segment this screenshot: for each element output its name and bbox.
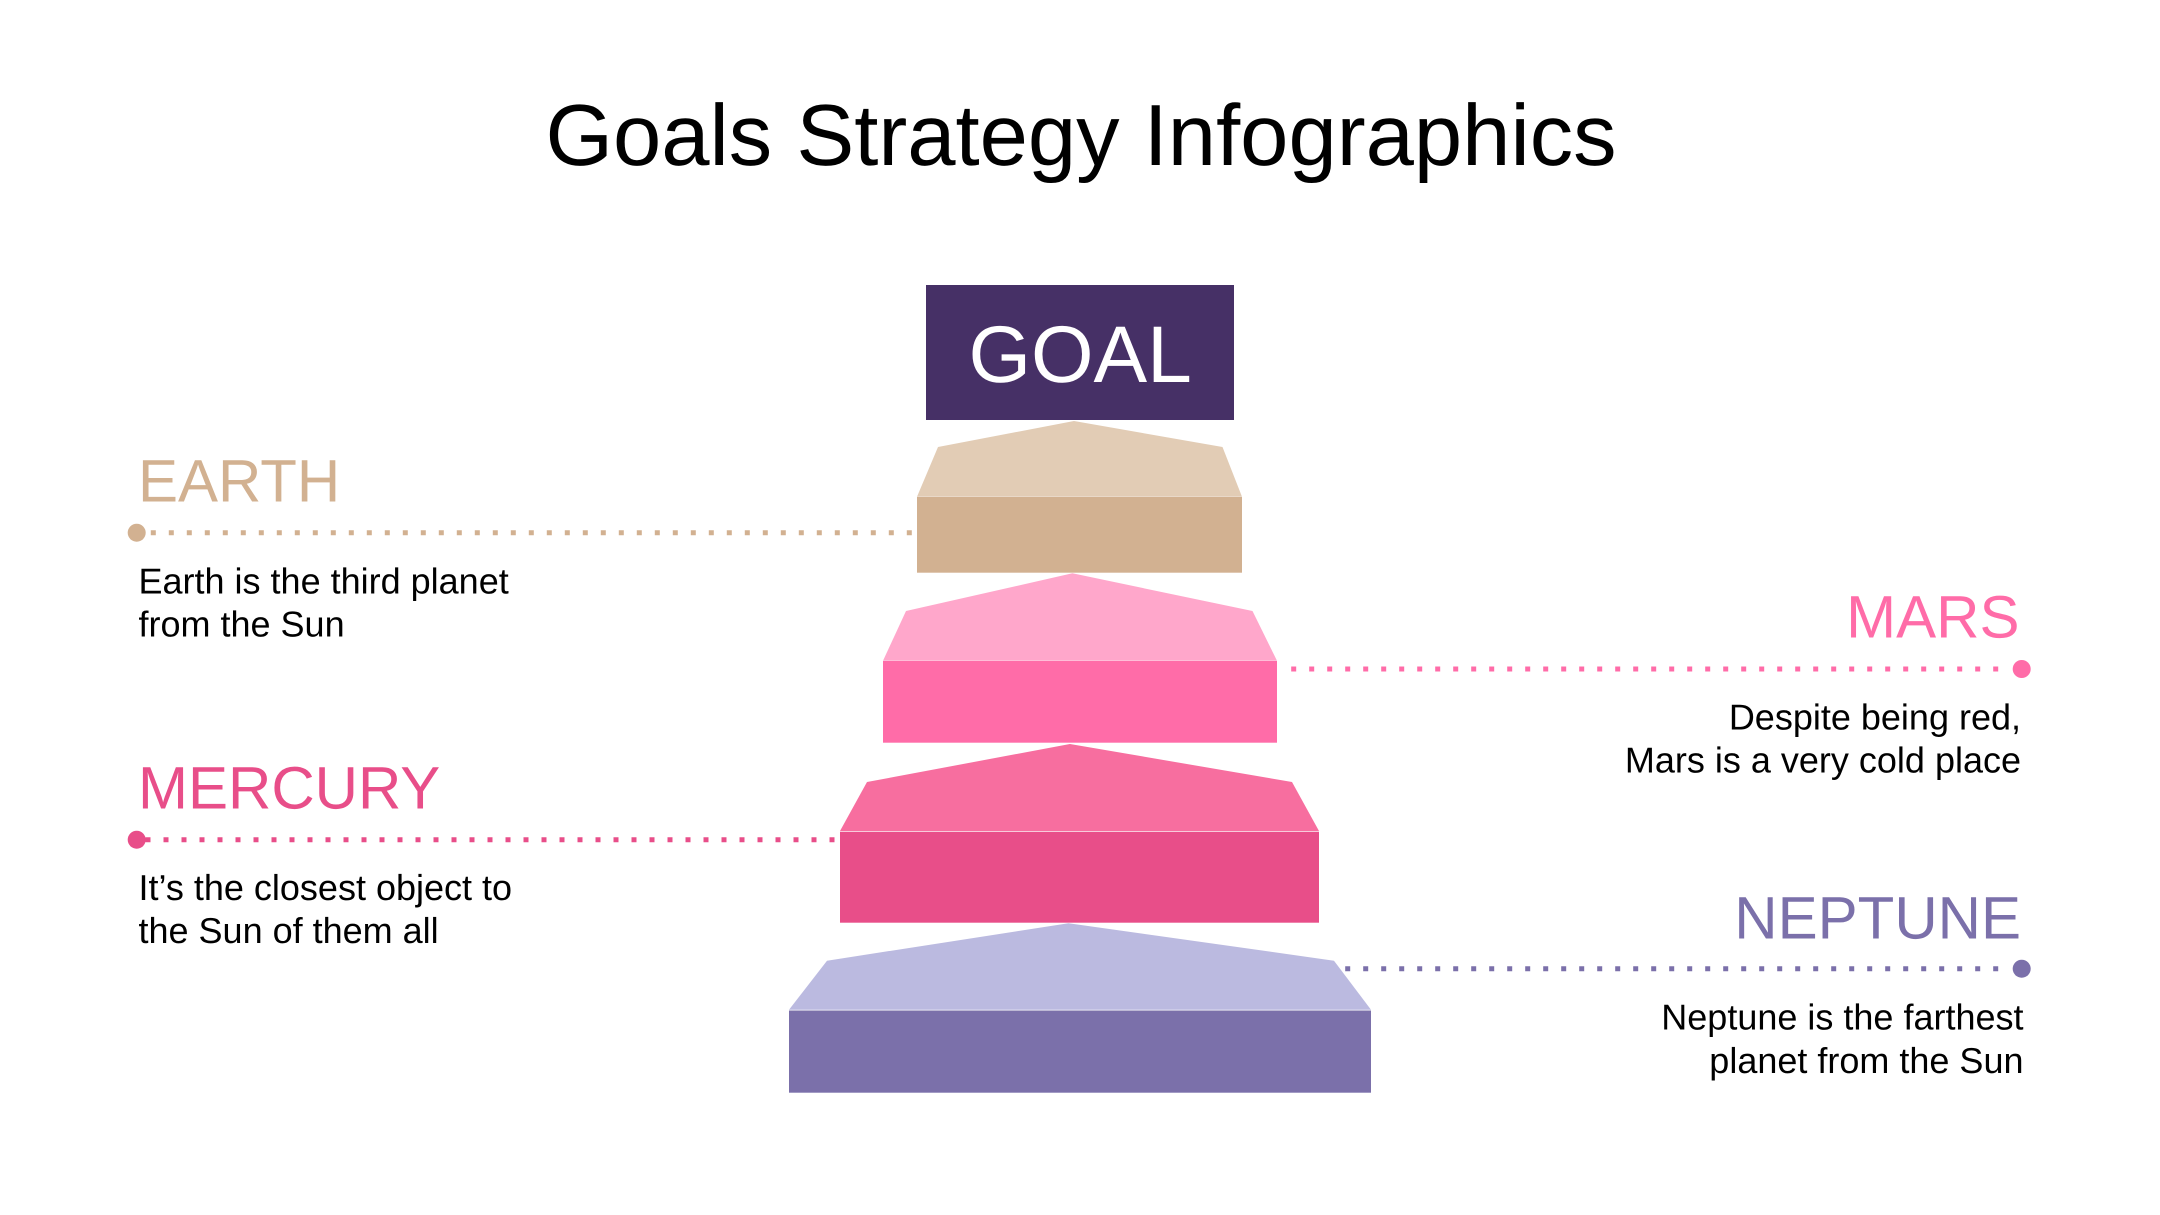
- text: Earth description: from the Sun: [138, 604, 345, 645]
- panel: Neptune callout: [1345, 884, 2031, 1081]
- heading: Mars: MARS: [1846, 584, 2020, 650]
- connector: Mars dotted line: [1290, 660, 2031, 678]
- heading: Neptune: NEPTUNE: [1734, 884, 2021, 951]
- text: Neptune description: Neptune is the farthest: [1661, 996, 2024, 1037]
- connector: Neptune dotted line: [1345, 960, 2031, 978]
- text: Neptune description: planet from the Sun: [1709, 1040, 2024, 1081]
- tier: Mars: [883, 573, 1277, 743]
- text: Mars description: Despite being red,: [1729, 696, 2021, 737]
- goal block: GOAL: [969, 310, 1192, 400]
- text: Mars description: Mars is a very cold place: [1625, 740, 2021, 780]
- panel: Mars callout: [1290, 584, 2031, 780]
- tier: Earth: [917, 421, 1242, 573]
- goal block: [926, 285, 1234, 420]
- panel: Mercury callout: [128, 754, 835, 951]
- heading: Mercury: MERCURY: [138, 754, 440, 821]
- heading: Earth: EARTH: [138, 448, 340, 515]
- title: Goals Strategy Infographics: [545, 87, 1617, 184]
- connector: Earth dotted line: [128, 524, 912, 542]
- tier: Neptune: [789, 923, 1371, 1093]
- tier: Mercury: [840, 744, 1319, 923]
- text: Mercury description: the Sun of them all: [138, 910, 439, 951]
- connector: Mercury dotted line: [128, 831, 835, 849]
- text: Mercury description: It’s the closest object to: [138, 867, 512, 908]
- text: Earth description: Earth is the third planet: [138, 561, 509, 602]
- panel: Earth callout: [128, 448, 912, 645]
